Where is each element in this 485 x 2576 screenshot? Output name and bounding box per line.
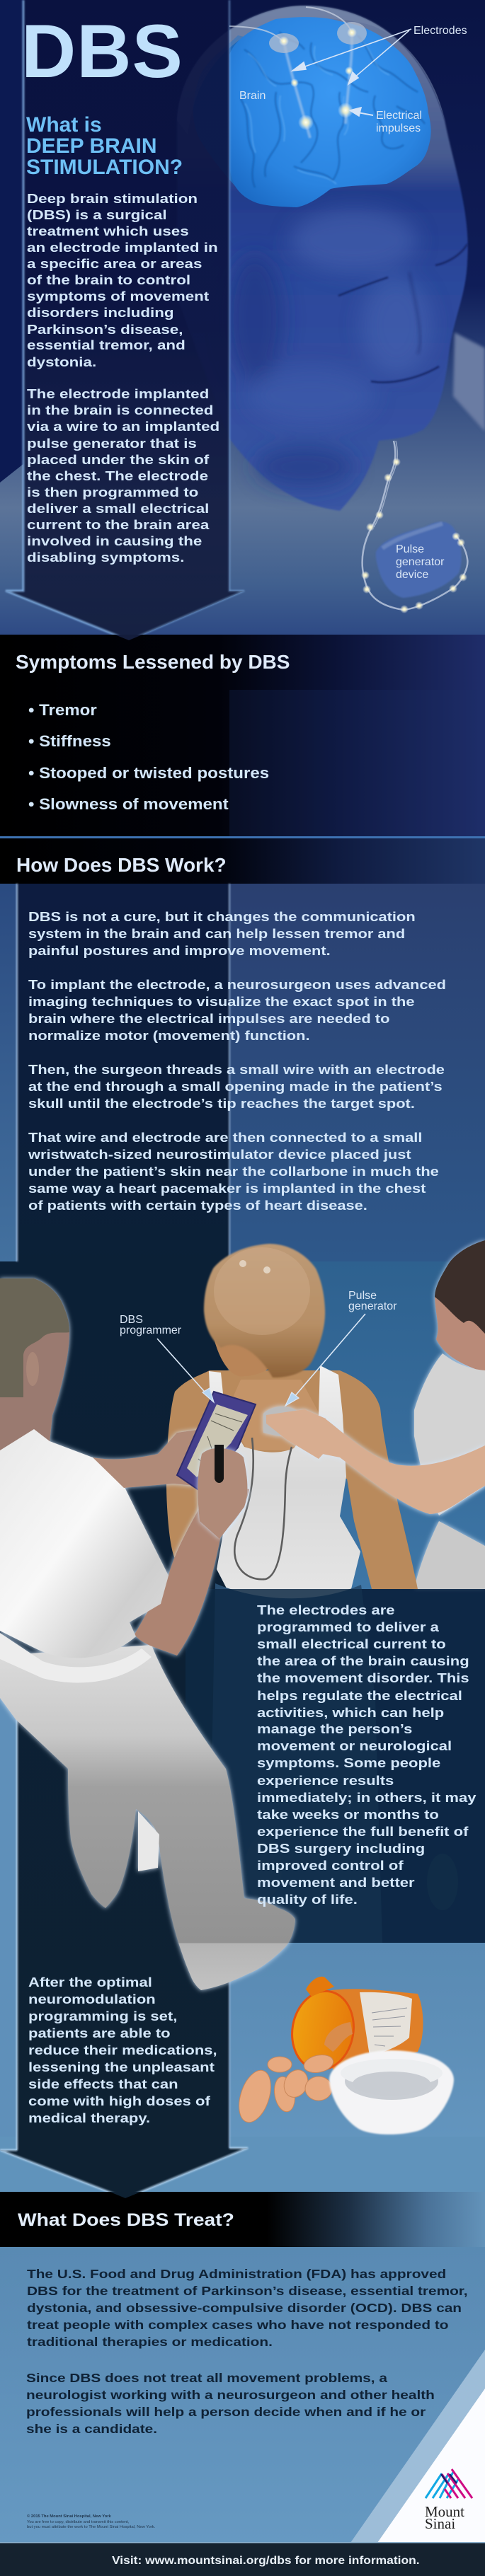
bottle opening xyxy=(286,1986,360,2075)
electrode caps xyxy=(269,33,299,53)
title: DBS: DBS xyxy=(21,8,183,93)
woman face xyxy=(212,1330,283,1376)
woman skin xyxy=(166,1370,418,1589)
text: electrodes programmed: activities, which can help xyxy=(257,1706,444,1721)
text: definition of DBS: Deep brain stimulation xyxy=(27,192,198,207)
paragraph: to implant: normalize motor (movement) function. xyxy=(28,1029,310,1044)
doctor hand with stylus xyxy=(198,1445,247,1539)
pulse generator programmer wand xyxy=(263,1407,297,1436)
item stiffness: • Stiffness xyxy=(28,732,111,750)
label electrical impulses: impulses xyxy=(376,122,421,134)
bottle label xyxy=(360,1992,412,2056)
item tremor: • Tremor xyxy=(28,701,97,719)
text: after programming: neuromodulation xyxy=(28,1993,156,2007)
text: electrode and pulse generator: involved in causing the xyxy=(27,534,202,549)
text: definition of DBS: a specific area or areas xyxy=(27,257,202,272)
lower section background xyxy=(0,2137,485,2200)
tank top xyxy=(209,1365,360,1602)
section background: head illustration backdrop xyxy=(0,0,485,635)
doctor forearm xyxy=(135,1479,249,1656)
rear shoe xyxy=(138,1811,159,1871)
text: electrodes programmed: take weeks or months to xyxy=(257,1808,439,1823)
bottle lip xyxy=(306,1977,334,1997)
text: after programming: medical therapy. xyxy=(28,2112,150,2126)
text: how DBS works paragraphs xyxy=(28,910,446,1213)
logo mark xyxy=(426,2469,472,2498)
doctor trousers xyxy=(0,1645,295,1990)
stylus xyxy=(215,1445,224,1483)
label electrodes: Electrodes xyxy=(413,25,467,37)
text: definition of DBS: Parkinson’s disease, xyxy=(27,323,183,337)
wire sparks xyxy=(361,458,467,613)
text: electrodes programmed: movement and better xyxy=(257,1876,415,1890)
paragraph: neurostimulator: under the patient’s skin near the collarbone in much the xyxy=(28,1165,439,1179)
label: pulse generator: Pulse xyxy=(348,1290,377,1302)
text: electrodes programmed: the area of the brain causing xyxy=(257,1655,469,1669)
text: electrode and pulse generator: disabling symptoms. xyxy=(27,550,184,565)
brain: rear darker lobe xyxy=(229,35,244,186)
text: electrodes programmed: programmed to deliver a xyxy=(257,1621,440,1635)
eyes nose mouth xyxy=(338,244,467,382)
text: candidate: professionals will help a person decide when and if he or xyxy=(26,2405,426,2420)
lead wire xyxy=(363,441,467,610)
arrow tip over band xyxy=(115,635,142,640)
text: electrodes programmed: immediately; in others, it may xyxy=(257,1791,477,1806)
band: what does DBS treat xyxy=(0,2192,485,2247)
paragraph: neurostimulator: same way a heart pacemaker is implanted in the chest xyxy=(28,1182,426,1196)
paragraph: to implant: To implant the electrode, a neurosurgeon uses advanced xyxy=(28,978,446,993)
doctor ear xyxy=(26,1352,39,1386)
electrical impulse sparks xyxy=(279,37,289,45)
text: definition of DBS: symptoms of movement xyxy=(27,289,209,304)
text: after programming: side effects that can xyxy=(28,2078,178,2092)
text: electrodes programmed: experience results xyxy=(257,1774,394,1789)
text: electrode and pulse generator: in the brain is connected xyxy=(27,403,213,418)
list: symptoms xyxy=(28,701,269,813)
paragraph: threads wire: Then, the surgeon threads a small wire with an electrode xyxy=(28,1063,445,1078)
footer text: Visit: www.mountsinai.org/dbs for more information. xyxy=(112,2554,420,2567)
text: electrode and pulse generator: pulse generator that is xyxy=(27,437,197,451)
lead wire and pulse generator device xyxy=(361,441,467,613)
label: pulse generator: generator xyxy=(348,1300,397,1312)
text: candidate: neurologist working with a neurosurgeon and other health xyxy=(26,2389,435,2403)
bottle body xyxy=(319,1989,423,2069)
woman chest xyxy=(225,1380,320,1450)
label electrical impulses: Electrical xyxy=(376,110,422,122)
label text lines xyxy=(372,2008,407,2046)
footer bar xyxy=(0,2542,485,2576)
illustration: head with brain and electrodes xyxy=(177,6,485,511)
text: definition of DBS: an electrode implanted in xyxy=(27,241,218,255)
programmer screen xyxy=(187,1404,248,1477)
text: electrode and pulse generator: via a wire to an implanted xyxy=(27,420,219,434)
text: electrode and pulse generator: the chest. The electrode xyxy=(27,469,208,484)
text: electrode and pulse generator: is then programmed to xyxy=(27,485,198,500)
screen details xyxy=(198,1414,242,1468)
nurse face xyxy=(435,1273,485,1373)
paragraph: to implant: imaging techniques to visualize the exact spot in the xyxy=(28,995,414,1010)
shoulder patch xyxy=(453,333,485,432)
arrow: pulse generator xyxy=(285,1314,365,1406)
text: electrodes programmed: small electrical current to xyxy=(257,1638,446,1652)
device: DBS programmer xyxy=(177,1392,256,1491)
text: electrodes programmed: helps regulate the electrical xyxy=(257,1690,462,1704)
text: definition of DBS: disorders including xyxy=(27,306,174,320)
text: definition of DBS: of the brain to control xyxy=(27,273,190,288)
panel: electrodes text backing xyxy=(186,1589,485,1943)
woman's shoes xyxy=(245,1836,282,1900)
text: copyright: You are free to copy, distribute and transmit this content, xyxy=(27,2520,130,2524)
text: FDA approval: treat people with complex cases who have not responded to xyxy=(27,2318,448,2333)
text: definition of DBS: (DBS) is a surgical xyxy=(27,208,167,223)
text: FDA approval: DBS for the treatment of Parkinson’s disease, essential tremor, xyxy=(27,2285,468,2299)
text: electrodes programmed: experience the full benefit of xyxy=(257,1825,469,1839)
text: electrode and pulse generator: current to the brain area xyxy=(27,518,210,533)
nurse hair xyxy=(435,1240,485,1334)
paragraph: threads wire: skull until the electrode’s tip reaches the target spot. xyxy=(28,1097,415,1111)
text: candidate: Since DBS does not treat all movement problems, a xyxy=(26,2372,387,2386)
illustration: patient and doctors xyxy=(0,1240,485,1990)
paragraph: not a cure: system in the brain and can help lessen tremor and xyxy=(28,927,405,942)
item postures: • Stooped or twisted postures xyxy=(28,764,269,782)
heading: symptoms lessened: Symptoms Lessened by DBS xyxy=(16,651,290,673)
text: electrodes programmed: the movement disorder. This xyxy=(257,1672,469,1686)
woman hair xyxy=(204,1244,325,1377)
text: electrodes programmed: DBS surgery including xyxy=(257,1842,425,1856)
text: FDA approval: dystonia, and obsessive-compulsive disorder (OCD). DBS can xyxy=(27,2301,462,2316)
heading: what is deep brain stimulation: DEEP BRAIN xyxy=(26,134,156,158)
label: DBS programmer: DBS xyxy=(120,1314,143,1326)
arrow: DBS programmer xyxy=(157,1339,214,1402)
nurse hand xyxy=(266,1409,333,1459)
text: definition of DBS: essential tremor, and xyxy=(27,338,186,353)
background: left strip diagonal xyxy=(0,0,24,483)
brain: highlights xyxy=(245,40,389,184)
heading: what is deep brain stimulation: What is xyxy=(26,113,102,137)
item slowness: • Slowness of movement xyxy=(28,795,229,813)
paragraph: not a cure: painful postures and improve movement. xyxy=(28,944,331,959)
label: DBS programmer: programmer xyxy=(120,1324,182,1336)
skull cap overlay xyxy=(229,6,445,119)
text: FDA approval: The U.S. Food and Drug Administration (FDA) has approved xyxy=(27,2268,446,2282)
electrode wires xyxy=(229,7,352,42)
label pulse generator device: Pulse xyxy=(396,543,424,555)
belt xyxy=(0,1633,152,1682)
paragraph: to implant: brain where the electrical impulses are needed to xyxy=(28,1012,389,1027)
text: FDA approval: traditional therapies or medication. xyxy=(27,2335,273,2350)
text: definition of DBS: dystonia. xyxy=(27,355,96,370)
jeans xyxy=(205,1583,382,1943)
text: after programming: lessening the unpleasant xyxy=(28,2061,215,2075)
head silhouette xyxy=(229,4,469,511)
text: electrode and pulse generator: The electrode implanted xyxy=(27,387,209,402)
text: electrodes programmed: The electrodes are xyxy=(257,1604,395,1618)
panel: what is DBS arrow xyxy=(6,0,244,640)
device body xyxy=(376,522,462,598)
figure: woman arms and chest xyxy=(166,1365,458,1943)
doctor head xyxy=(0,1278,69,1457)
text: electrodes programmed: improved control of xyxy=(257,1859,404,1873)
text: electrodes programmed: quality of life. xyxy=(257,1893,358,1907)
scalp incision marks xyxy=(239,1260,246,1267)
paragraph: threads wire: at the end through a small opening made in the patient’s xyxy=(28,1080,443,1094)
doctor hair xyxy=(0,1278,69,1397)
text: electrodes programmed: movement or neurological xyxy=(257,1740,452,1754)
logo text: Mount xyxy=(425,2503,464,2520)
paragraph: neurostimulator: of patients with certain types of heart disease. xyxy=(28,1199,367,1213)
text: electrode and pulse generator: deliver a small electrical xyxy=(27,502,209,516)
brain: sulci xyxy=(241,32,425,187)
text: electrode and pulse generator: placed under the skin of xyxy=(27,453,209,468)
panel: how it works arrow xyxy=(0,884,248,2198)
text: candidate: she is a candidate. xyxy=(26,2422,157,2437)
label brain: Brain xyxy=(239,90,266,102)
bottle cap xyxy=(329,2050,454,2135)
brain: main body xyxy=(227,17,431,207)
lower arrow tip xyxy=(110,2192,141,2198)
figure: doctor xyxy=(0,1278,295,1990)
text: after programming: programming is set, xyxy=(28,2010,177,2024)
text: definition of DBS: treatment which uses xyxy=(27,224,189,239)
face shading xyxy=(227,209,432,488)
cap inner xyxy=(345,2063,438,2100)
brain labels xyxy=(239,25,467,581)
section background: how DBS works xyxy=(0,884,485,2197)
label pulse generator device: device xyxy=(396,569,428,581)
text: after programming: reduce their medications, xyxy=(28,2044,217,2058)
doctor shirt xyxy=(0,1429,169,1658)
pill inside xyxy=(324,2022,353,2052)
shaved scalp overlay xyxy=(214,1247,310,1335)
label pulse generator device: generator xyxy=(396,556,445,568)
logo: Mount Sinai xyxy=(425,2469,472,2532)
cable xyxy=(234,1438,292,1579)
text: after programming: patients are able to xyxy=(28,2027,171,2041)
paragraph: neurostimulator: wristwatch-sized neurostimulator device placed just xyxy=(28,1148,411,1162)
heading: what is deep brain stimulation: STIMULATION? xyxy=(26,156,183,179)
logo text: Sinai xyxy=(425,2515,455,2532)
skin arm of nurse xyxy=(263,1407,485,1514)
callout arrows xyxy=(292,29,411,116)
pills xyxy=(233,2052,335,2126)
heading: how does DBS work: How Does DBS Work? xyxy=(16,854,227,876)
paragraph: neurostimulator: That wire and electrode are then connected to a small xyxy=(28,1131,422,1145)
text: copyright: © 2015 The Mount Sinai Hospital, New York xyxy=(27,2514,112,2519)
nurse pants xyxy=(414,1521,485,1589)
text: copyright: but you must attribute the work to The Mount Sinai Hospital, New York. xyxy=(27,2525,156,2529)
text: after programming: come with high doses of xyxy=(28,2095,210,2109)
nurse shirt xyxy=(414,1353,485,1515)
illustration: pill bottle and pills xyxy=(233,1977,454,2135)
text: electrodes programmed: symptoms. Some people xyxy=(257,1757,440,1771)
text: electrodes programmed: manage the person’s xyxy=(257,1723,412,1737)
heading: what does DBS treat: What Does DBS Treat? xyxy=(18,2210,234,2230)
figure: right nurse xyxy=(414,1240,485,1589)
lower panel background with logo triangle xyxy=(0,2247,485,2543)
paragraph: not a cure: DBS is not a cure, but it changes the communication xyxy=(28,910,416,925)
figure: woman head xyxy=(204,1244,325,1377)
text: after programming: After the optimal xyxy=(28,1976,152,1990)
doctor other arm xyxy=(93,1429,202,1488)
band: symptoms xyxy=(0,635,485,884)
